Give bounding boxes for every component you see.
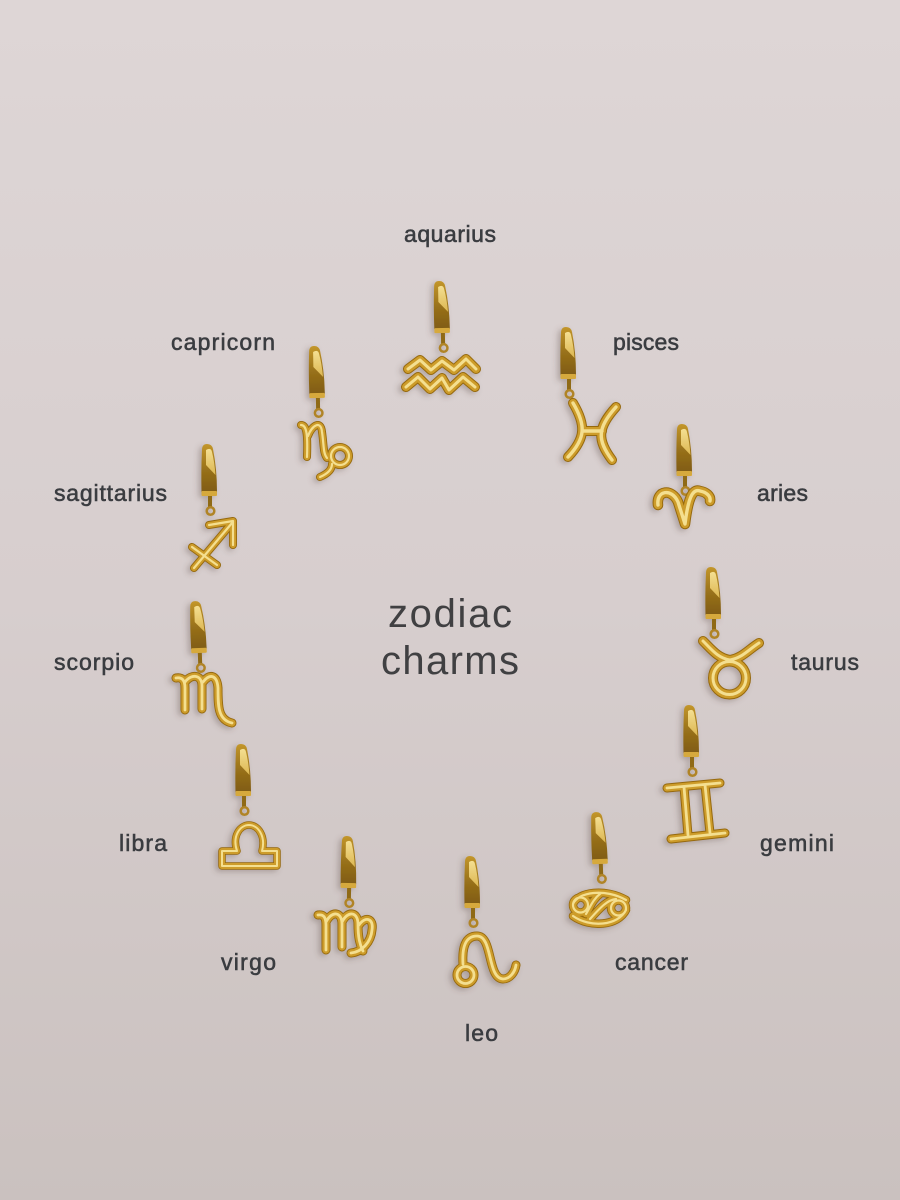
charm: scorpio [176,601,232,723]
charm: virgo [318,836,372,953]
title: zodiac [388,592,512,636]
label: sagittarius: sagittarius [54,480,167,506]
label: aquarius: aquarius [404,221,496,247]
label: cancer: cancer [615,949,688,975]
label: gemini: gemini [760,830,834,856]
charm: taurus [703,567,759,695]
charm: cancer [573,812,626,924]
charm: pisces [560,327,616,460]
charm: capricorn [301,346,349,477]
label: capricorn: capricorn [171,329,275,355]
charm: leo [457,856,516,984]
title: charms [381,639,519,683]
label: libra: libra [119,830,167,856]
label: leo: leo [465,1020,498,1046]
label: virgo: virgo [221,949,276,975]
charm: aries [658,424,710,524]
label: scorpio: scorpio [54,649,134,675]
title [381,592,519,683]
charm: aquarius [406,281,476,390]
label: pisces: pisces [613,329,679,355]
charm: gemini [667,705,725,839]
charm: sagittarius [192,444,233,568]
label: taurus: taurus [791,649,859,675]
label: aries: aries [757,480,808,506]
charm: libra [222,744,277,866]
